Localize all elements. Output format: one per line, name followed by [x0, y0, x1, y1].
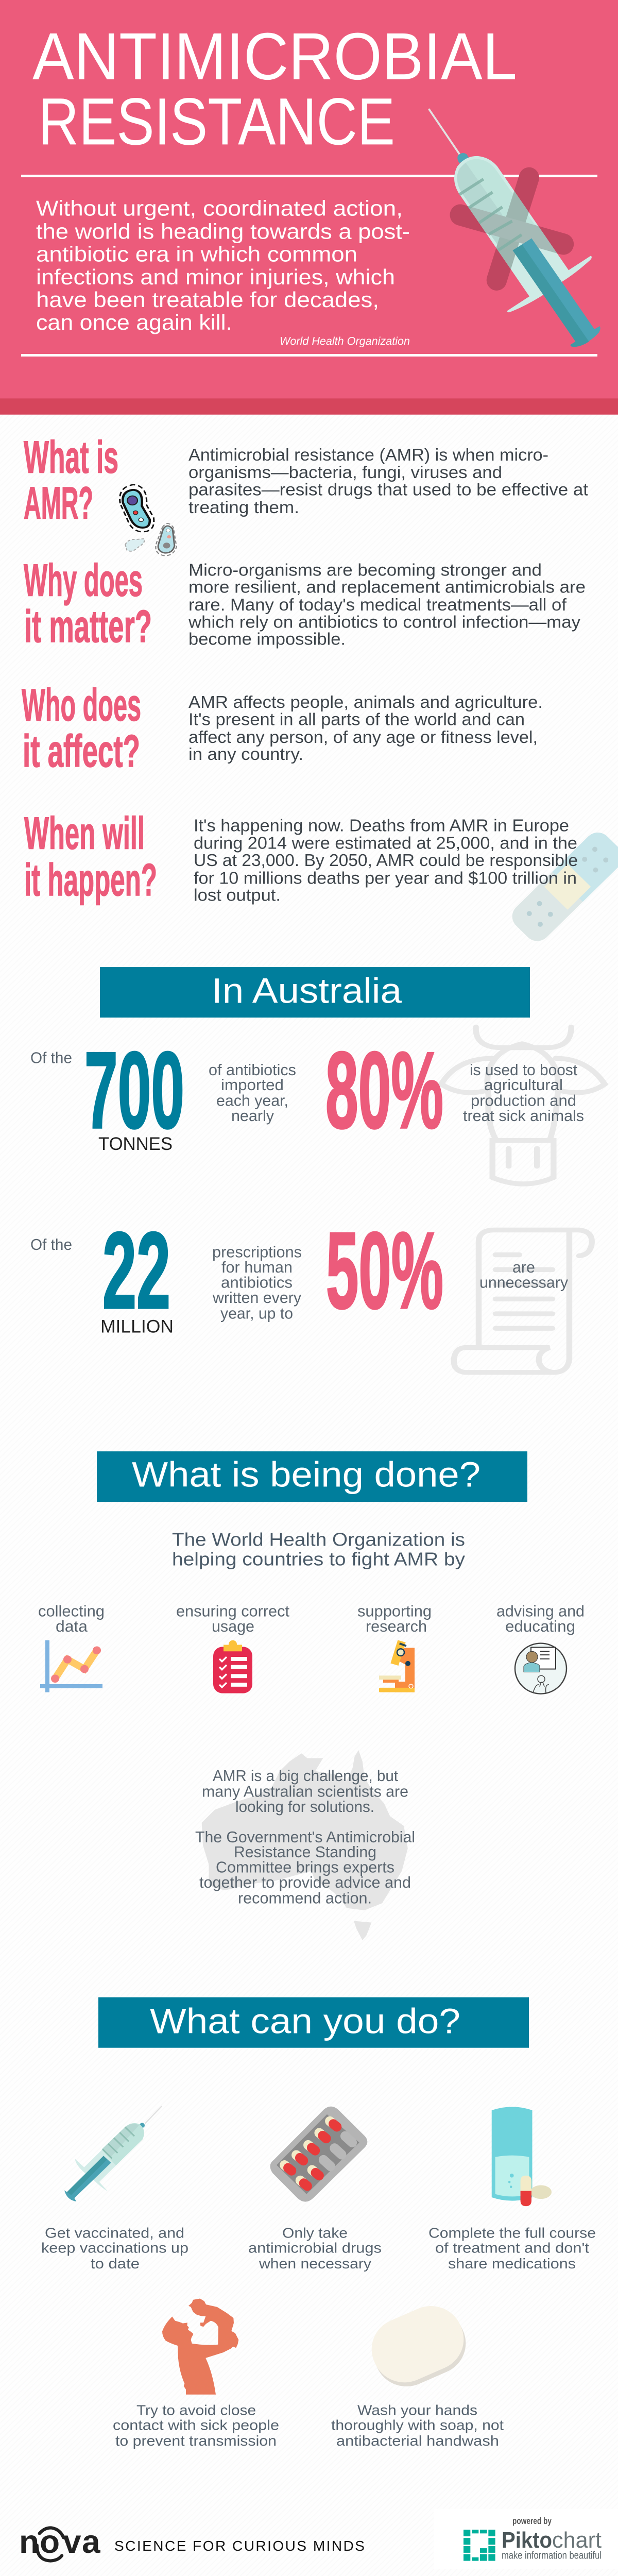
quote text: infections and minor injuries, which — [36, 265, 395, 290]
icon: piktochart mark — [464, 2530, 495, 2561]
text: of antibiotics imported: each year, — [216, 1092, 288, 1110]
item: ensuring correct usage: usage — [212, 1617, 254, 1635]
panel: when will it happen — [24, 808, 618, 946]
tagline: SCIENCE FOR CURIOUS MINDS — [114, 2538, 365, 2554]
stat: 22 million: 22 — [102, 1210, 170, 1331]
text block: australian response: Committee brings experts — [216, 1858, 394, 1876]
text: is used to boost: production and — [471, 1092, 576, 1110]
icon: prescription scroll — [454, 1230, 592, 1372]
text block: australian response: looking for solutions. — [235, 1798, 374, 1816]
stat: 700 tonnes: TONNES — [98, 1133, 173, 1154]
panel: what is being done — [38, 1451, 585, 1940]
text block — [194, 817, 578, 905]
icon: microscope — [379, 1641, 415, 1692]
heading — [24, 808, 157, 905]
stat: 700 tonnes: 700 — [84, 1030, 184, 1151]
text block: It's happening now. Deaths from AMR in Europe — [194, 817, 569, 835]
text block — [188, 693, 543, 764]
stat: 80 percent: 80% — [325, 1030, 443, 1151]
heading: it matter? — [24, 601, 152, 652]
footer: nova logo — [19, 2524, 365, 2561]
heading: it happen? — [24, 854, 157, 905]
stat: 700 tonnes — [30, 1030, 184, 1154]
text block: australian response: together to provide advice and — [199, 1873, 411, 1891]
text block: treating them. — [188, 498, 299, 517]
title — [32, 19, 517, 159]
quote text: have been treatable for decades, — [36, 287, 379, 312]
title: ANTIMICROBIAL — [32, 19, 517, 94]
footer: piktochart credit — [434, 2509, 618, 2569]
stat: 22 million — [30, 1210, 174, 1337]
text block: australian response — [195, 1767, 415, 1907]
caption — [113, 2402, 279, 2449]
banner: What is being done? — [132, 1454, 480, 1495]
icon: bandage — [507, 827, 618, 946]
caption: to date — [91, 2256, 140, 2272]
text: are unnecessary — [479, 1258, 569, 1291]
footer: piktochart credit: chart — [552, 2528, 602, 2553]
caption: keep vaccinations up — [41, 2240, 188, 2256]
caption: share medications — [448, 2256, 576, 2272]
text block — [188, 446, 589, 517]
caption: of treatment and don't — [435, 2240, 589, 2256]
text block: Antimicrobial resistance (AMR) is when micro- — [188, 446, 548, 465]
item: advising and educating: educating — [505, 1617, 575, 1635]
text block: australian response: Resistance Standing — [234, 1843, 376, 1861]
text block: more resilient, and replacement antimicrobials are — [188, 578, 586, 597]
caption: to prevent transmission — [115, 2433, 277, 2449]
text block: become impossible. — [188, 630, 346, 649]
title: RESISTANCE — [38, 84, 395, 159]
text: is used to boost: agricultural — [484, 1076, 563, 1094]
caption — [428, 2225, 596, 2272]
banner — [97, 1451, 527, 1502]
text: prescriptions for human antibiotics: antibiotics — [221, 1274, 293, 1291]
text: of antibiotics imported: imported — [221, 1076, 284, 1094]
icon: cow — [441, 1027, 605, 1184]
text block: in any country. — [188, 745, 303, 764]
text block: parasites—resist drugs that used to be effective at — [188, 481, 589, 499]
text: is used to boost: treat sick animals — [463, 1107, 584, 1125]
quote text — [36, 196, 410, 335]
item: ensuring correct usage — [176, 1602, 289, 1693]
icon: syringe with bandage cross — [429, 110, 600, 347]
text block: during 2014 were estimated at 25,000, and in the — [194, 834, 577, 853]
text: are unnecessary: are — [512, 1258, 535, 1276]
footer: piktochart credit: Pikto — [502, 2528, 552, 2553]
panel: what can you do — [41, 1997, 596, 2449]
caption: Wash your hands — [357, 2402, 477, 2418]
heading: it affect? — [23, 725, 140, 776]
caption — [248, 2225, 382, 2272]
caption: antimicrobial drugs — [248, 2240, 382, 2256]
intro text: The World Health Organization is — [172, 1529, 465, 1550]
text: is used to boost: is used to boost — [470, 1061, 577, 1079]
intro text — [172, 1529, 466, 1570]
heading: What is — [24, 431, 118, 482]
banner: What can you do? — [150, 2001, 460, 2041]
footer: piktochart credit: powered by — [512, 2516, 552, 2526]
panel: what is AMR — [24, 431, 589, 555]
text: prescriptions for human antibiotics — [212, 1243, 302, 1322]
caption — [331, 2402, 504, 2449]
intro text: helping countries to fight AMR by — [172, 1549, 466, 1570]
quote text: Without urgent, coordinated action, — [36, 196, 403, 221]
text block: australian response: many Australian scientists are — [202, 1783, 408, 1800]
text: prescriptions for human antibiotics: prescriptions — [212, 1243, 302, 1261]
text block: organisms—bacteria, fungi, viruses and — [188, 464, 502, 482]
text: of antibiotics imported: of antibiotics — [209, 1061, 296, 1079]
item: advising and educating: advising and — [496, 1602, 585, 1620]
stat: 22 million: MILLION — [100, 1316, 174, 1337]
heading — [22, 680, 141, 776]
banner — [98, 1997, 529, 2048]
icon: glass and pills — [492, 2107, 552, 2206]
footer: nova logo: nova — [19, 2524, 100, 2560]
panel: header — [0, 0, 618, 415]
item: supporting research — [357, 1602, 432, 1692]
panel: who does it affect — [22, 680, 543, 776]
text: of antibiotics imported: nearly — [231, 1107, 274, 1125]
text block: It's present in all parts of the world and can — [188, 710, 525, 729]
text block: rare. Many of today's medical treatments—all of — [188, 596, 567, 615]
text block: for 10 millions deaths per year and $100 trillion in — [194, 869, 577, 888]
caption: contact with sick people — [113, 2417, 279, 2433]
caption: Only take — [282, 2225, 348, 2241]
text: are unnecessary: unnecessary — [479, 1274, 569, 1291]
text block: australian response: The Government's Antimicrobial — [195, 1828, 415, 1846]
caption: when necessary — [259, 2256, 371, 2272]
text block — [188, 561, 586, 649]
panel: in australia — [30, 967, 605, 1372]
caption: Get vaccinated, and — [45, 2225, 184, 2241]
caption: thoroughly with soap, not — [331, 2417, 504, 2433]
icon: blister pack — [270, 2107, 367, 2202]
heading: Who does — [22, 680, 141, 731]
text block: Micro-organisms are becoming stronger and — [188, 561, 542, 580]
icon: bacteria — [120, 485, 177, 555]
icon: syringe — [64, 2106, 162, 2201]
item: ensuring correct usage: ensuring correct — [176, 1602, 289, 1620]
quote text: can once again kill. — [36, 310, 232, 335]
quote attribution: World Health Organization — [280, 334, 410, 347]
text block: affect any person, of any age or fitness level, — [188, 728, 538, 747]
text block: australian response: AMR is a big challenge, but — [213, 1767, 398, 1785]
item: advising and educating — [496, 1602, 585, 1694]
item: collecting data: collecting — [38, 1602, 105, 1620]
stat: 700 tonnes: Of the — [30, 1049, 72, 1066]
text: prescriptions for human antibiotics: written every — [212, 1289, 302, 1307]
caption: antibacterial handwash — [336, 2433, 499, 2449]
caption: Try to avoid close — [136, 2402, 256, 2418]
map of Australia — [202, 1750, 408, 1940]
text block: AMR affects people, animals and agriculture. — [188, 693, 543, 712]
text block: australian response: recommend action. — [238, 1889, 372, 1907]
heading: Why does — [24, 554, 143, 605]
icon: line chart — [40, 1640, 102, 1692]
banner — [100, 967, 530, 1018]
text: of antibiotics imported — [209, 1061, 296, 1125]
text block: lost output. — [194, 886, 281, 905]
text block: which rely on antibiotics to control infection—may — [188, 613, 580, 632]
quote text: the world is heading towards a post- — [36, 219, 410, 244]
stat: 22 million: Of the — [30, 1235, 72, 1253]
item: collecting data: data — [56, 1617, 88, 1635]
banner: In Australia — [212, 971, 402, 1011]
text block: US at 23,000. By 2050, AMR could be responsible — [194, 851, 578, 870]
text: is used to boost — [463, 1061, 584, 1125]
text: prescriptions for human antibiotics: year, up to — [220, 1304, 293, 1322]
heading: When will — [24, 808, 145, 859]
item: supporting research: supporting — [357, 1602, 432, 1620]
caption: Complete the full course — [428, 2225, 596, 2241]
icon: parent lifting baby — [162, 2299, 238, 2395]
heading — [24, 554, 152, 652]
item: supporting research: research — [366, 1617, 427, 1635]
heading: AMR? — [24, 477, 93, 528]
caption — [41, 2225, 188, 2272]
heading — [24, 431, 118, 528]
icon: teacher and students — [515, 1643, 566, 1694]
text: prescriptions for human antibiotics: for human — [221, 1258, 293, 1276]
quote text: antibiotic era in which common — [36, 242, 357, 267]
stat: 50 percent: 50% — [326, 1210, 443, 1331]
panel: why does it matter — [24, 554, 586, 652]
item: collecting data — [38, 1602, 105, 1692]
icon: clipboard — [213, 1640, 252, 1693]
icon: soap — [362, 2296, 476, 2397]
